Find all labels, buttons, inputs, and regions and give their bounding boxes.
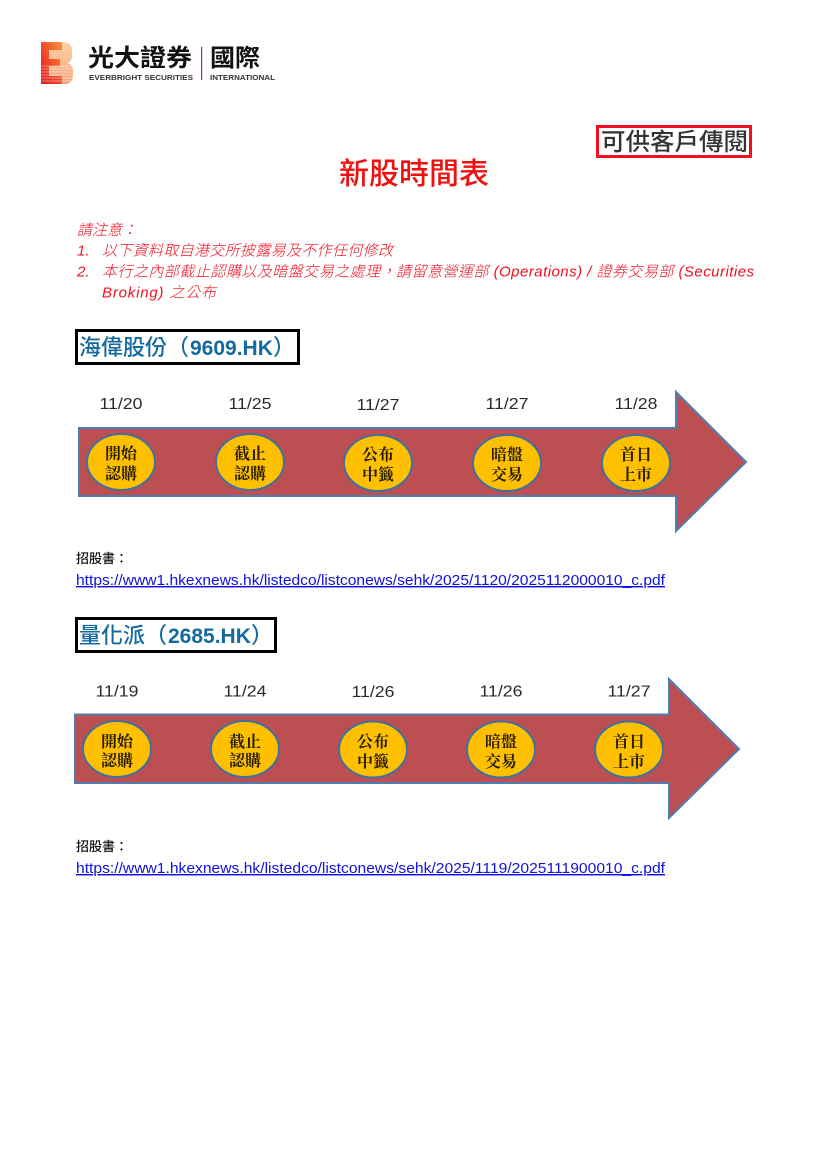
step: 首日上市 11/27 [595,684,663,778]
heading: 海偉股份 [76,330,298,364]
step: 開始認購 11/20: 11/20 [100,396,143,413]
step: 首日上市 11/27: 上市 [613,753,645,771]
step: 暗盤交易 11/27 [473,396,541,491]
step: 公布中籤 11/27 [344,397,412,491]
step: 暗盤交易 11/26: 暗盤 [485,732,517,751]
notes [76,222,754,302]
step: 開始認購 11/19: 11/19 [96,684,139,700]
step: 公布中籤 11/27: 11/27 [356,397,400,414]
heading: 量化派: ） [251,623,273,648]
notes: 本行之內部截止認購以及暗盤交易之處理，請留意營運部 (Operations) / 證券交易部 (Securities [102,264,754,280]
step: 截止認購 11/25 [216,396,284,490]
icon: brand B mark [41,42,73,84]
step: 截止認購 11/24 [211,684,279,777]
step: 公布中籤 11/27: 中籤 [362,465,394,484]
step: 公布中籤 11/26 [339,684,407,778]
step: 暗盤交易 11/26: 交易 [485,752,517,771]
step: 截止認購 11/24: 認購 [229,751,261,770]
arrow timeline [79,392,746,531]
step: 暗盤交易 11/27: 暗盤 [491,445,523,464]
arrow timeline [75,679,739,818]
step: 截止認購 11/24: 11/24 [224,684,267,700]
notes: 2. [76,264,90,280]
step: 開始認購 11/19: 開始 [101,733,135,751]
step: 開始認購 11/19 [83,684,151,777]
step: 開始認購 11/19: 認購 [101,751,133,770]
step: 首日上市 11/28 [602,396,670,491]
step: 暗盤交易 11/26 [467,684,535,778]
step: 截止認購 11/24: 截止 [229,732,261,751]
heading: 海偉股份: 9609.HK [190,337,273,360]
step: 開始認購 11/20: 認購 [105,464,137,483]
company name: 光大證券 [88,45,192,72]
heading: 海偉股份: ） [273,335,295,360]
logo [41,42,276,84]
prospectus label: 招股書： [76,551,128,566]
heading: 量化派: 2685.HK [168,625,251,648]
notes: 以下資料取自港交所披露易及不作任何修改 [102,242,395,260]
title: 新股時間表 [339,158,489,191]
step: 公布中籤 11/26: 公布 [357,732,389,751]
step: 首日上市 11/28: 11/28 [614,396,658,413]
panel: 9609.HK [76,330,746,589]
step: 開始認購 11/20: 開始 [105,445,139,463]
panel: 2685.HK [75,618,739,877]
international English name: INTERNATIONAL [210,75,276,82]
step: 首日上市 11/28: 上市 [620,466,652,484]
notes: 1. [77,242,90,260]
heading: 量化派: 量化派（ [79,623,167,648]
step: 公布中籤 11/26: 中籤 [357,752,389,771]
prospectus label: 招股書： [76,839,128,854]
step: 截止認購 11/25: 認購 [234,464,266,483]
heading: 海偉股份: 海偉股份（ [79,335,189,360]
step: 首日上市 11/27: 11/27 [608,684,651,700]
step: 公布中籤 11/27: 公布 [362,445,394,464]
heading: 量化派 [76,618,276,652]
step: 公布中籤 11/26: 11/26 [352,684,395,701]
step: 首日上市 11/27: 首日 [613,733,645,751]
step: 截止認購 11/25: 11/25 [228,396,272,413]
client circulation badge: 可供客戶傳閱 [601,129,748,156]
step: 首日上市 11/28: 首日 [620,446,652,464]
step: 開始認購 11/20 [87,396,155,490]
notes: Broking) 之公布 [102,284,218,302]
prospectus link: https://www1.hkexnews.hk/listedco/listconews/sehk/2025/1119/2025111900010_c.pdf [76,861,666,877]
step: 截止認購 11/25: 截止 [234,444,266,463]
notes: 請注意： [77,222,137,239]
international name: 國際 [210,45,260,72]
step: 暗盤交易 11/27: 交易 [491,465,523,484]
step: 暗盤交易 11/27: 11/27 [486,396,529,413]
prospectus link: https://www1.hkexnews.hk/listedco/listconews/sehk/2025/1120/2025112000010_c.pdf [76,573,666,589]
step: 暗盤交易 11/26: 11/26 [480,684,523,700]
company English name: EVERBRIGHT SECURITIES [89,73,193,82]
